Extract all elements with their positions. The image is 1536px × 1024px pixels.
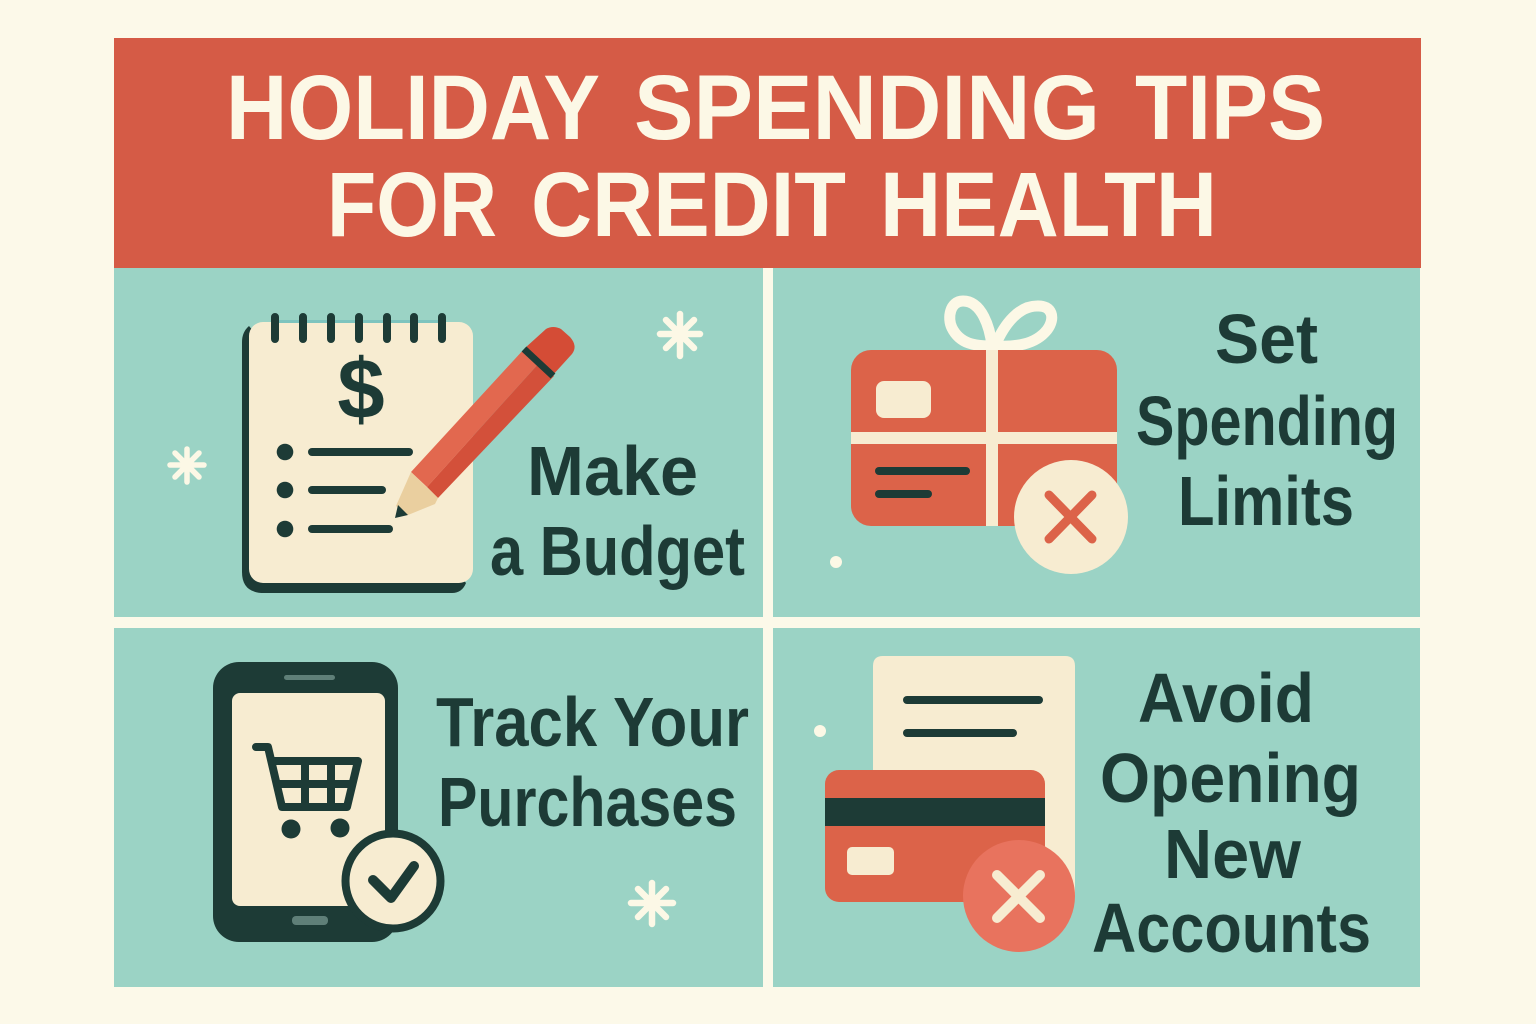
label: track your purchases [436,683,749,841]
icon: snowflake right [660,314,700,356]
panel: set spending limits [773,268,1420,617]
panel: make a budget [114,268,763,617]
icon: x badge [1014,460,1128,574]
title: TIPS [1135,57,1325,159]
icon: dot [814,725,826,737]
icon: check badge [346,834,440,928]
label: set spending limits [1136,300,1398,540]
icon: credit card [825,770,1045,902]
title: HEALTH [880,154,1217,256]
label: track your purchases: Track Your [436,683,749,761]
title banner [114,38,1421,268]
label: track your purchases: Purchases [438,763,737,841]
icon: dot [830,556,842,568]
icon: pencil [395,327,575,518]
title: HOLIDAY [226,57,600,159]
label: avoid opening new accounts: Accounts [1092,889,1371,967]
label: avoid opening new accounts: Avoid [1138,659,1314,737]
icon: snowflake [631,883,673,924]
label: set spending limits: Limits [1178,462,1354,540]
label: avoid opening new accounts [1092,659,1371,967]
title: FOR [327,154,497,256]
label: set spending limits: Set [1215,300,1318,378]
icon: document [873,656,1075,896]
icon: phone [213,662,398,942]
title [226,57,1325,256]
label: avoid opening new accounts: Opening [1100,739,1361,817]
label: make a budget: Make [527,432,698,510]
label: make a budget: a Budget [490,512,745,590]
panel: avoid opening new accounts [773,628,1420,987]
dollar sign: $ [337,342,385,437]
title: SPENDING [634,57,1100,159]
icon: snowflake left [170,449,204,482]
icon: notepad [242,317,473,593]
bow [950,301,1052,346]
title: CREDIT [531,154,846,256]
checklist [277,444,413,537]
shopping cart [256,747,358,807]
icon: x badge [963,840,1075,952]
label: make a budget [490,432,745,590]
panel: track your purchases [114,628,763,987]
label: set spending limits: Spending [1136,382,1398,460]
label: avoid opening new accounts: New [1164,815,1302,893]
icon: gift card [851,301,1117,526]
